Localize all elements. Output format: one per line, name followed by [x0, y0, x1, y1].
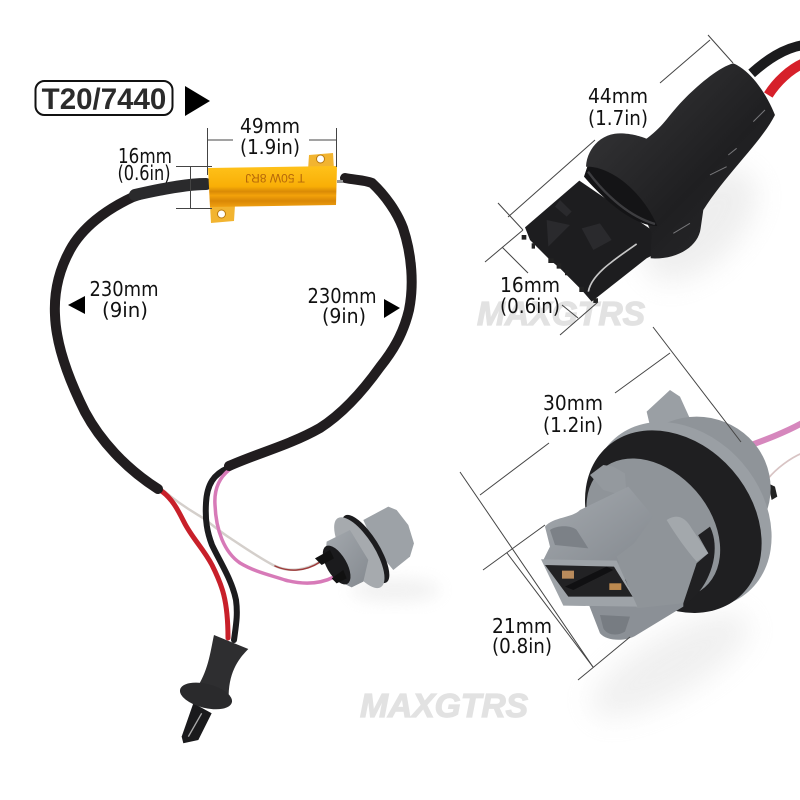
- resistor: [208, 153, 343, 223]
- plug wire: red: [768, 63, 800, 95]
- socket terminal: left: [562, 571, 574, 579]
- tab: top: [308, 153, 334, 170]
- dimension: 230mm left: (9in): [102, 298, 148, 322]
- plug printed marks: [673, 110, 765, 233]
- dimension: 230mm right: 230mm: [308, 284, 376, 308]
- dimension: 230mm right: (9in): [322, 304, 366, 328]
- wire: right braided lead: [229, 178, 412, 466]
- dimension: 230mm right: [308, 284, 400, 328]
- tab: bottom: [210, 205, 235, 223]
- small plug tip: [182, 703, 212, 743]
- resistor marking: T 50W 8RJ: [245, 171, 305, 185]
- small socket rear opening: [317, 541, 356, 589]
- wire: clear: [163, 490, 320, 570]
- socket bottom lobe: [588, 597, 683, 640]
- dimension: 16mm resistor: 16mm: [118, 144, 172, 168]
- arrow: badge pointer: [185, 86, 210, 116]
- plug wedge teeth: [522, 235, 598, 303]
- wiring harness: [55, 178, 412, 640]
- socket rear stub: [768, 483, 777, 500]
- dimension: 230mm left: 230mm: [90, 277, 158, 301]
- wire: left heat shrink: [135, 184, 206, 195]
- wire: clear tip: [275, 562, 320, 570]
- small socket flange: [325, 510, 394, 595]
- dimension: 16mm plug: [500, 273, 598, 335]
- plug wedge body: [525, 181, 663, 302]
- socket top lobe: [543, 487, 653, 563]
- socket terminal: right: [609, 583, 621, 590]
- dimension: 49mm: (1.9in): [240, 135, 300, 159]
- small socket rear body: [325, 530, 368, 587]
- badge: T20/7440: T20/7440: [42, 83, 166, 116]
- socket wire: clear: [768, 453, 800, 478]
- plug heat shrink: [586, 63, 775, 258]
- dimension: 16mm resistor: [118, 144, 212, 208]
- watermark: bottom: MAXGTRS: [360, 687, 528, 724]
- dimension: 30mm: (1.2in): [543, 413, 603, 437]
- dimension: 44mm: 44mm: [588, 84, 648, 108]
- dimension: 49mm: 49mm: [240, 114, 300, 138]
- dimension: 21mm: [483, 525, 630, 680]
- dimension: 16mm plug: (0.6in): [500, 294, 560, 318]
- socket lobe cavities: [550, 526, 588, 548]
- plug contact wire: [588, 244, 637, 292]
- socket ridge: [667, 517, 708, 562]
- small bulb socket: [315, 507, 414, 595]
- plug collar opening: [584, 167, 657, 226]
- socket rear dome: [623, 417, 771, 560]
- socket wire: pink: [733, 423, 800, 452]
- socket seal ring: [549, 395, 798, 648]
- dimension: 30mm: 30mm: [543, 391, 603, 415]
- plug wedge ridges: [547, 200, 612, 250]
- socket dark cavity: [545, 565, 633, 597]
- wire: black: [206, 468, 237, 640]
- socket key tab: [590, 465, 627, 497]
- dimension: 44mm: [485, 35, 733, 273]
- dimension: 21mm: 21mm: [492, 614, 552, 638]
- socket inner face: [559, 432, 747, 625]
- wire: red: [160, 490, 228, 638]
- dimension: 44mm: (1.7in): [588, 106, 648, 130]
- small socket front lobes: [363, 507, 414, 570]
- watermark: top: MAXGTRS: [477, 295, 645, 332]
- plug collar highlight: [588, 172, 655, 224]
- dimension: 230mm left: [68, 277, 158, 322]
- resistor lead pin: [337, 180, 343, 183]
- small plug heat shrink: [195, 635, 248, 695]
- socket grey flange: [555, 386, 800, 644]
- socket lower shadow: [673, 527, 715, 605]
- socket top tab: [647, 390, 697, 440]
- small socket seal ring: [333, 509, 398, 589]
- small T20 wedge plug: [177, 635, 248, 743]
- socket close-up: [541, 386, 800, 648]
- top plug close-up: [522, 45, 800, 303]
- wire: pink: [215, 470, 334, 583]
- dimension: 30mm: [460, 327, 741, 667]
- dimension: 16mm resistor: (0.6in): [118, 161, 170, 185]
- resistor body: [208, 166, 337, 207]
- wire: left braided lead: [55, 184, 207, 489]
- socket divider: [565, 567, 613, 590]
- background shadows: [350, 149, 776, 736]
- socket front frame: [541, 559, 637, 607]
- dimension: 16mm plug: 16mm: [500, 273, 560, 297]
- small plug flange: [177, 678, 235, 714]
- dimension: 21mm: (0.8in): [492, 634, 552, 658]
- dimension: 49mm: [207, 114, 336, 175]
- small socket rear cable stubs: [315, 550, 334, 565]
- plug wire: black: [752, 45, 800, 73]
- socket right lobe: [617, 516, 708, 608]
